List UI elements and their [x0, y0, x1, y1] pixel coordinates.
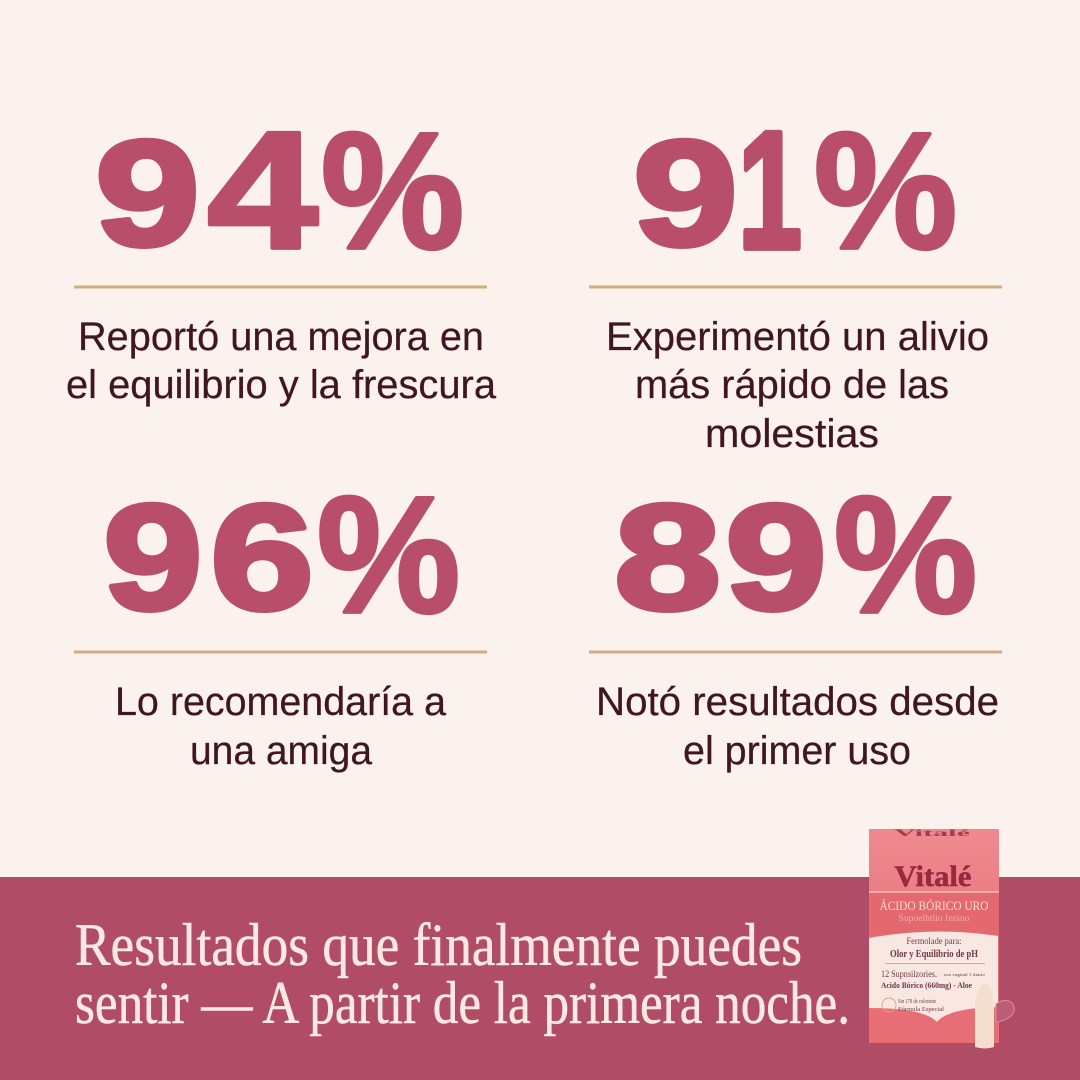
caption 89% — [596, 680, 999, 773]
box label text: 12 Supnsilzories. — [881, 969, 937, 979]
big number 91%: 9 — [633, 110, 738, 278]
box label panel — [869, 931, 998, 1022]
box label text — [881, 936, 986, 1013]
caption 89%: el primer uso — [683, 729, 911, 773]
tagline: Resultados que finalmente puedes — [75, 912, 802, 978]
big number 89%: % — [834, 462, 977, 648]
box label text: Sin 170 de colorante — [898, 999, 936, 1005]
big number 96%: 9 — [103, 473, 202, 641]
tagline — [75, 912, 850, 1036]
caption 91%: más rápido de las — [635, 363, 949, 407]
caption 96% — [115, 680, 447, 773]
caption 89%: Notó resultados desde — [596, 680, 999, 724]
caption 91%: molestias — [705, 412, 879, 456]
big number 91%: % — [814, 98, 957, 284]
big number 91%: 1 — [738, 98, 802, 284]
panel: stat 89% — [589, 462, 1002, 773]
caption 94%: Reportó una mejora en — [78, 315, 484, 359]
big number 91% — [633, 98, 957, 284]
caption 91%: Experimentó un alivio — [606, 315, 989, 359]
box label text: Fermolade para: — [906, 936, 962, 946]
box label text: Acido Bórico (660mg) - Aloe — [881, 980, 972, 990]
box top flap text: Vitalé — [894, 828, 970, 838]
caption 91% — [606, 315, 989, 456]
box label text: Fórmula Especial — [898, 1007, 944, 1013]
box brand: Vitalé — [894, 860, 972, 893]
big number 89% — [614, 462, 977, 648]
big number 94%: % — [321, 98, 464, 284]
big number 94%: 4 — [207, 97, 318, 284]
product box: Supoelhtlio Intáno — [898, 913, 970, 923]
big number 96% — [103, 462, 460, 648]
caption 94% — [66, 315, 497, 407]
big number 94%: 9 — [95, 110, 200, 278]
big number 96%: % — [317, 462, 460, 648]
big number 89%: 9 — [725, 474, 827, 641]
suppository — [975, 983, 994, 1048]
box product name: ÁCIDO BÓRICO URO — [880, 898, 988, 913]
big number 89%: 8 — [614, 473, 721, 641]
panel: bottom band — [0, 877, 1080, 1080]
box label text: · uso vaginal 1 diario — [941, 972, 986, 977]
flower detail — [996, 1000, 1014, 1022]
caption 96%: una amiga — [190, 729, 373, 773]
tagline: sentir — A partir de la primera noche. — [75, 970, 850, 1036]
caption 96%: Lo recomendaría a — [115, 680, 447, 724]
panel: stat 91% — [589, 98, 1002, 456]
box label text: Olor y Equilibrio de pH — [890, 949, 978, 960]
panel: stat 96% — [74, 462, 487, 773]
big number 96%: 6 — [210, 473, 314, 641]
panel: stat 94% — [66, 97, 497, 407]
big number 94% — [95, 97, 464, 284]
product box — [869, 828, 1014, 1048]
caption 94%: el equilibrio y la frescura — [66, 363, 497, 407]
